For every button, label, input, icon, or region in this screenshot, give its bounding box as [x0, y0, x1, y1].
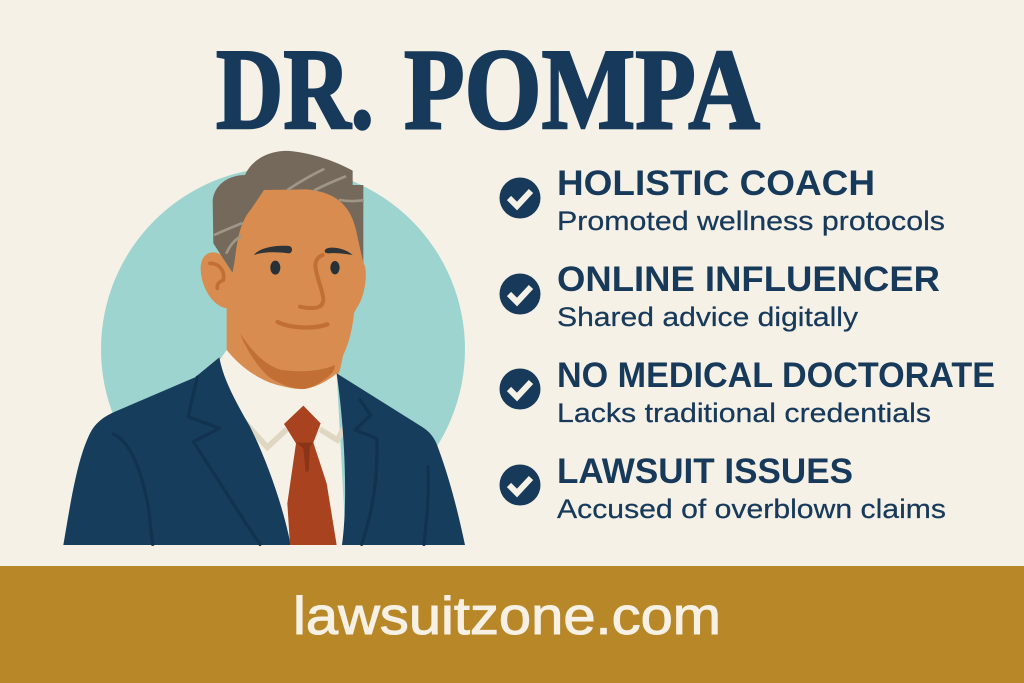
heading: HOLISTIC COACH — [557, 164, 875, 203]
collar shadow — [243, 420, 347, 447]
description: Lacks traditional credentials — [557, 398, 931, 428]
hair — [213, 151, 363, 277]
title: DR. — [216, 26, 374, 154]
face — [227, 189, 366, 372]
shirt — [218, 350, 346, 545]
mouth — [278, 322, 327, 328]
nose — [300, 255, 323, 308]
list item: no medical doctorate — [500, 356, 995, 428]
jacket left — [63, 357, 291, 545]
eyes — [270, 261, 340, 275]
heading: LAWSUIT ISSUES — [557, 452, 853, 491]
heading: ONLINE INFLUENCER — [557, 260, 940, 299]
teal background circle — [101, 167, 465, 531]
list item: online influencer — [500, 260, 940, 332]
title — [216, 26, 760, 154]
jacket right — [337, 373, 465, 545]
jaw shadow — [240, 333, 335, 389]
eyebrows — [254, 246, 353, 255]
description: Accused of overblown claims — [557, 494, 946, 524]
check icon — [500, 274, 540, 314]
list item: holistic coach — [500, 164, 945, 236]
list item: lawsuit issues — [500, 452, 946, 524]
check icon — [500, 368, 540, 410]
neck — [227, 300, 353, 400]
description: Promoted wellness protocols — [557, 206, 945, 236]
grey hair streaks — [215, 169, 363, 253]
website url: lawsuitzone.com — [293, 587, 721, 646]
ear — [201, 252, 237, 308]
illustration: portrait of man in suit — [63, 151, 465, 545]
check icon — [500, 464, 540, 506]
check icon — [500, 178, 540, 218]
footer banner — [0, 566, 1024, 683]
jacket seams — [113, 377, 428, 544]
heading: NO MEDICAL DOCTORATE — [557, 356, 995, 395]
title: POMPA — [404, 26, 760, 154]
necktie — [284, 406, 337, 545]
description: Shared advice digitally — [557, 302, 859, 332]
